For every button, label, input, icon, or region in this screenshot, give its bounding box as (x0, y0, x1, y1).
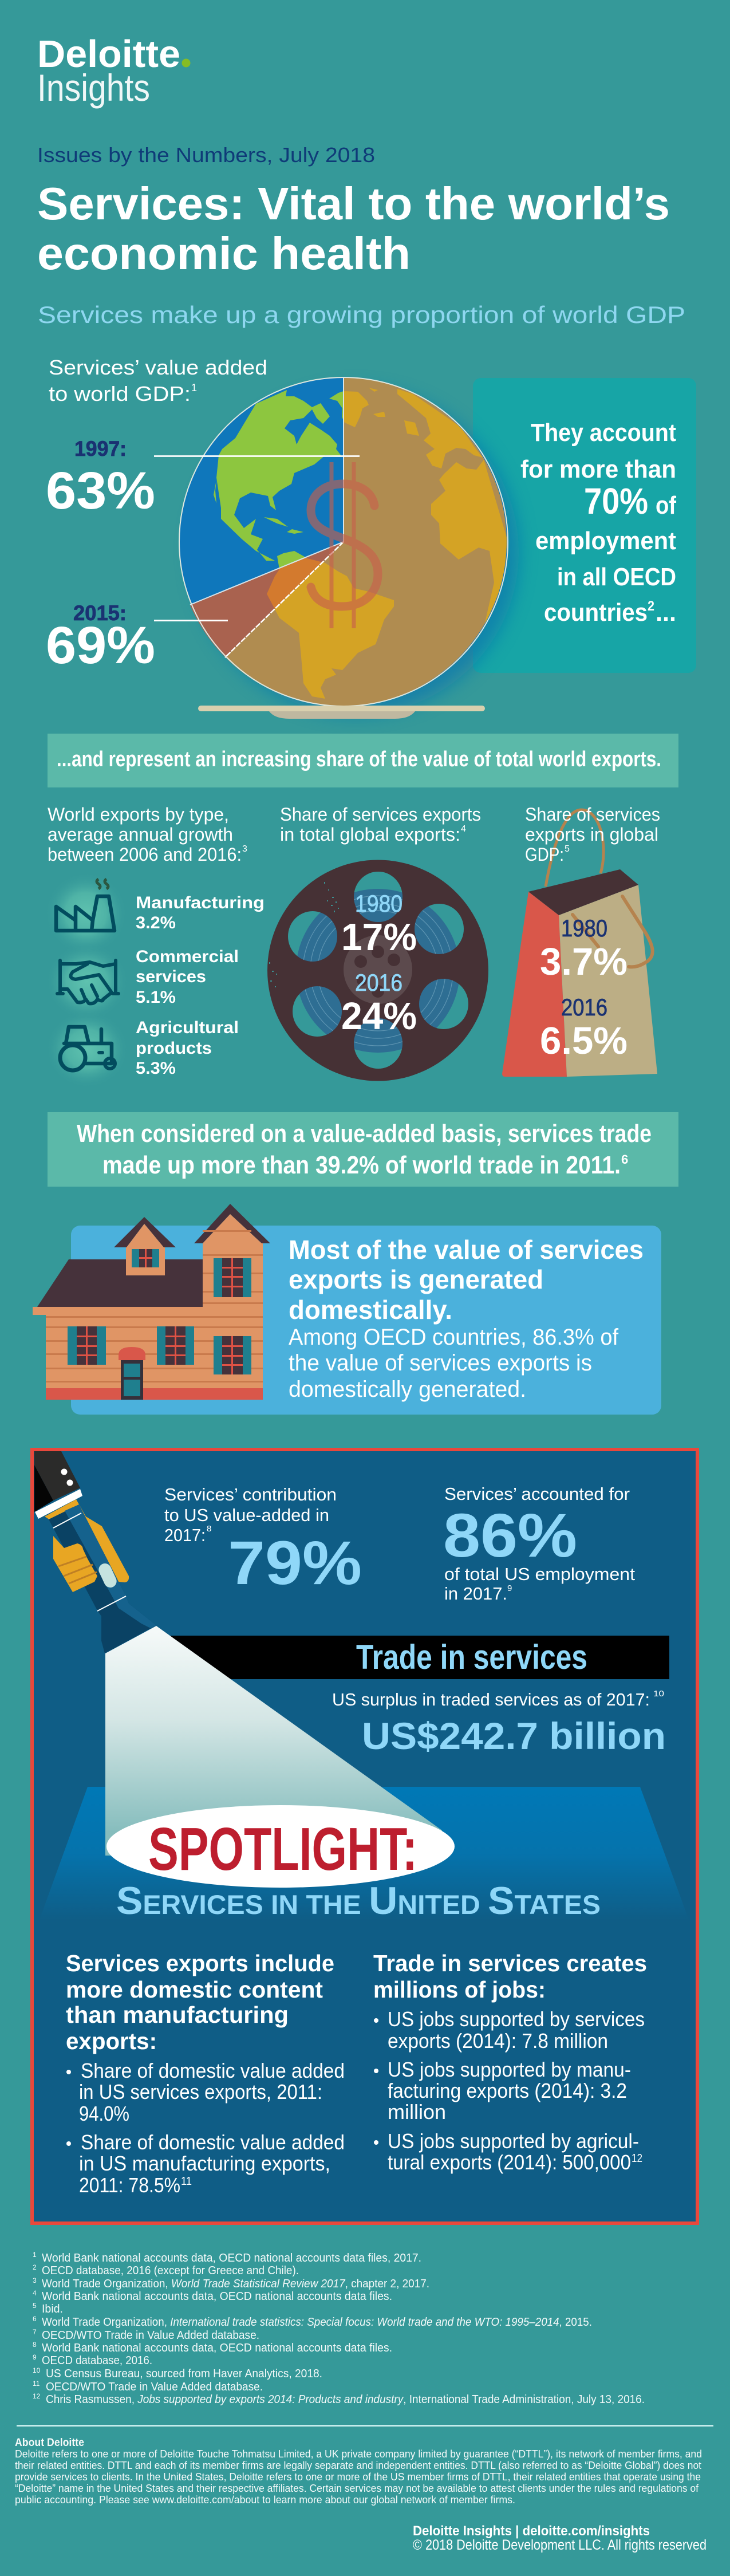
column: jobs: US jobs supported by services (388, 2007, 645, 2031)
stat: 2015 (46, 601, 228, 675)
icon: handshake (46, 943, 128, 1021)
footnotes: Ibid. (42, 2303, 63, 2315)
chart: shopping bag: 6.5% (540, 1019, 628, 1062)
column: domestic content: more domestic content (66, 1976, 323, 2003)
heading: share of global exports: Share of services exports (280, 804, 481, 825)
heading: share of global exports (280, 804, 481, 845)
chart: shopping bag: 1980 (561, 915, 607, 942)
footnotes: 4 (33, 2289, 37, 2297)
chart: shopping bag (502, 810, 657, 1077)
chart: film reel: 24% (341, 995, 417, 1038)
chart: film reel: 2016 (355, 969, 403, 996)
panel: employment callout: ... (656, 598, 676, 627)
chart: shopping bag: 3.7% (540, 940, 628, 983)
heading: share of global GDP: 5 (565, 844, 570, 854)
column: domestic content: exports: (66, 2028, 157, 2054)
stat: 2015: 2015: (73, 601, 127, 625)
text: agricultural products: 5.3% (136, 1059, 176, 1078)
icon: tractor (46, 1010, 128, 1088)
panel: domestically generated: Among OECD countries, 86.3% of (289, 1325, 619, 1350)
text: agricultural products: Agricultural (136, 1018, 239, 1037)
footnotes: 2 (33, 2263, 37, 2271)
heading: exports by type: World exports by type, (48, 804, 229, 825)
column: jobs: millions of jobs: (373, 1976, 546, 2003)
stat: US surplus: US surplus in traded services as of 2017: (332, 1689, 650, 1710)
stat: US surplus: 10 (653, 1689, 664, 1699)
stat: US value-added: 2017: (164, 1525, 206, 1545)
banner: share of exports (48, 734, 678, 787)
stat: US value-added: 8 (207, 1524, 211, 1534)
panel: employment callout: of (656, 491, 676, 519)
credits (413, 2523, 707, 2553)
heading: spotlight: SPOTLIGHT: (148, 1815, 417, 1883)
column: domestic content: 2011: 78.5% (79, 2173, 180, 2197)
panel: employment callout: 2 (648, 598, 654, 614)
subtitle: Services make up a growing proportion of world GDP (38, 301, 685, 328)
footnotes: World Trade Organization, World Trade Statistical Review 2017, chapter 2, 2017. (42, 2278, 429, 2290)
panel: employment callout: 70% (584, 480, 648, 522)
footnotes: 6 (33, 2315, 37, 2323)
panel: domestically generated: exports is generated (289, 1265, 543, 1294)
footnotes: World Trade Organization, International trade statistics: Special focus: World trade and the WTO: 1995–2014, 2015. (42, 2316, 592, 2329)
footnotes (33, 2251, 645, 2406)
stat: US value-added: 79% (228, 1528, 362, 1597)
about Deloitte: provide services to clients. In the United States, Deloitte refers to one or more of the US member firms of DTTL, their related entities that operate using the (15, 2471, 701, 2483)
stat: 1997: 1997: (74, 437, 127, 460)
panel: domestically generated: Most of the value of services (289, 1235, 644, 1265)
column: jobs: Trade in services creates (373, 1950, 647, 1976)
stat: US employment (443, 1484, 635, 1604)
footnotes: 11 (33, 2380, 40, 2388)
panel: employment callout: countries (544, 598, 648, 627)
logo: Deloitte Insights: Deloitte (37, 33, 180, 76)
logo: Deloitte Insights: Insights (37, 66, 150, 109)
footnotes: World Bank national accounts data, OECD national accounts data files, 2017. (42, 2252, 421, 2264)
panel: spotlight on US services (32, 1450, 697, 2223)
icon: factory (45, 872, 127, 955)
banner: value-added basis: 6 (621, 1152, 628, 1167)
chart: film reel: 1980 (355, 890, 403, 917)
heading: exports by type (48, 804, 247, 865)
column: jobs: exports (2014): 7.8 million (388, 2029, 608, 2053)
footnotes: 10 (33, 2366, 41, 2374)
text: manufacturing: Manufacturing (136, 893, 265, 912)
door (119, 1347, 145, 1400)
about Deloitte: Deloitte refers to one or more of Deloitte Touche Tohmatsu Limited, a UK private company limited by guarantee (“DTTL”), its network of member firms, and (15, 2448, 702, 2460)
heading: value added: Services’ value added (49, 356, 267, 379)
panel: employment callout: in all OECD (557, 563, 676, 591)
heading: share of global GDP: Share of services (525, 804, 660, 825)
footnotes: World Bank national accounts data, OECD national accounts data files. (42, 2342, 392, 2354)
panel: employment callout: employment (535, 527, 676, 555)
title: economic health (37, 228, 411, 279)
panel: employment callout: for more than (520, 455, 676, 483)
footnotes: 8 (33, 2341, 37, 2349)
text: manufacturing (136, 893, 265, 932)
flashlight (34, 1451, 156, 1653)
stat: US employment: 86% (443, 1500, 577, 1570)
column: jobs: 12 (632, 2152, 642, 2165)
chart: shopping bag: 2016 (561, 994, 607, 1021)
stat: US value-added: Services’ contribution (164, 1484, 337, 1504)
panel: employment callout: They account (531, 419, 676, 447)
column: domestic content (66, 1950, 345, 2197)
footnotes: OECD database, 2016. (42, 2354, 152, 2367)
text: manufacturing: 3.2% (136, 913, 176, 932)
footnotes: OECD/WTO Trade in Value Added database. (42, 2329, 259, 2342)
heading: value added: 1 (191, 382, 197, 393)
about Deloitte: “Deloitte” name in the United States and their respective affiliates. Certain services may not be available to attest clients under the rules and regulations of (15, 2483, 699, 2494)
text: commercial services: services (136, 967, 206, 986)
column: domestic content: 94.0% (79, 2102, 129, 2125)
logo: Deloitte Insights (37, 33, 190, 109)
column: jobs: million (388, 2100, 446, 2124)
banner: trade in services (168, 1636, 669, 1679)
column: jobs (373, 1950, 647, 2174)
banner: trade in services: Trade in services (356, 1638, 587, 1676)
footnotes: 3 (33, 2276, 37, 2284)
stat: 2015: 69% (46, 616, 155, 675)
column: jobs: US jobs supported by agricul- (388, 2129, 639, 2153)
chart: globe pie (179, 377, 519, 719)
text: commercial services (136, 947, 239, 1007)
footnotes: 1 (33, 2251, 37, 2259)
credits: Deloitte Insights | deloitte.com/insights (413, 2523, 650, 2539)
about Deloitte (15, 2437, 702, 2506)
column: domestic content: in US services exports, 2011: (79, 2080, 322, 2104)
footnotes: 5 (33, 2302, 37, 2310)
title: Services: Vital to the world’s (37, 178, 670, 229)
issue label: Issues by the Numbers, July 2018 (37, 143, 375, 167)
column: jobs: tural exports (2014): 500,000 (388, 2150, 631, 2174)
chart: film reel (267, 860, 488, 1081)
stat: US employment: Services’ accounted for (444, 1484, 630, 1504)
about Deloitte: public accounting. Please see www.deloitte.com/about to learn more about our global network of member firms. (15, 2494, 515, 2506)
banner: value-added basis: made up more than 39.2% of world trade in 2011. (102, 1151, 621, 1179)
stat: 1997: 63% (46, 462, 155, 520)
column: domestic content: in US manufacturing exports, (79, 2152, 330, 2175)
heading: value added (49, 356, 267, 405)
heading: value added: to world GDP: (49, 382, 191, 405)
heading: exports by type: average annual growth (48, 824, 233, 845)
stat: US value-added: to US value-added in (164, 1505, 329, 1525)
footnotes: OECD database, 2016 (except for Greece and Chile). (42, 2264, 299, 2277)
panel: domestically generated (71, 1226, 661, 1415)
panel: employment callout (473, 378, 696, 673)
heading: share of global GDP (525, 804, 660, 865)
about Deloitte: their related entities. DTTL and each of its member firms are legally separate and independent entities. DTTL (also referred to as “Deloitte Global”) does not (15, 2460, 701, 2471)
column: domestic content: 11 (181, 2175, 192, 2188)
chart: film reel: 17% (341, 916, 417, 959)
text: agricultural products: products (136, 1039, 212, 1058)
windows (68, 1249, 251, 1374)
footnotes: Chris Rasmussen, Jobs supported by exports 2014: Products and industry, International Trade Administration, July 13, 2016. (46, 2393, 645, 2406)
column: domestic content: than manufacturing (66, 2002, 289, 2028)
heading: exports by type: 3 (242, 844, 247, 854)
panel: domestically generated: domestically. (289, 1295, 452, 1325)
footnotes: US Census Bureau, sourced from Haver Analytics, 2018. (46, 2368, 322, 2380)
heading: share of global GDP: exports in global (525, 824, 658, 845)
text: commercial services: Commercial (136, 947, 239, 966)
heading: services in the United States: SERVICES IN THE UNITED STATES (116, 1879, 601, 1923)
stat: US surplus: US$242.7 billion (362, 1715, 666, 1757)
banner: value-added basis (48, 1112, 678, 1187)
panel: domestically generated: the value of services exports is (289, 1350, 592, 1376)
footnotes: OECD/WTO Trade in Value Added database. (46, 2381, 263, 2393)
about Deloitte: About Deloitte (15, 2437, 84, 2449)
panel: domestically generated: domestically generated. (289, 1377, 526, 1402)
heading: share of global GDP: GDP: (525, 844, 564, 865)
stat: US employment: in 2017. (444, 1584, 507, 1604)
column: domestic content: Services exports include (66, 1950, 334, 1976)
stat: 1997 (46, 437, 360, 520)
column: jobs: facturing exports (2014): 3.2 (388, 2079, 627, 2102)
stat: US employment: of total US employment (444, 1564, 635, 1584)
text: commercial services: 5.1% (136, 988, 176, 1007)
spotlight oval (106, 1805, 455, 1888)
footnotes: 7 (33, 2328, 37, 2336)
title (37, 178, 670, 279)
light beam (105, 1626, 442, 1856)
stat: US value-added (164, 1484, 362, 1597)
column: domestic content: Share of domestic value added (81, 2059, 345, 2082)
column: domestic content: Share of domestic value added (81, 2130, 345, 2154)
text: agricultural products (136, 1018, 239, 1078)
footnotes: 12 (33, 2392, 41, 2400)
footnotes: World Bank national accounts data, OECD national accounts data files. (42, 2290, 392, 2303)
column: jobs: US jobs supported by manu- (388, 2058, 631, 2081)
illustration: house (33, 1204, 270, 1400)
heading: exports by type: between 2006 and 2016: (48, 844, 242, 865)
heading: share of global exports: 4 (461, 824, 466, 834)
stage (40, 1787, 689, 1920)
stat: US surplus (332, 1689, 666, 1757)
heading: share of global exports: in total global exports: (280, 824, 460, 845)
footnotes: 9 (33, 2353, 37, 2361)
stat: US employment: 9 (507, 1584, 512, 1593)
icon: dollar sign (311, 462, 378, 628)
